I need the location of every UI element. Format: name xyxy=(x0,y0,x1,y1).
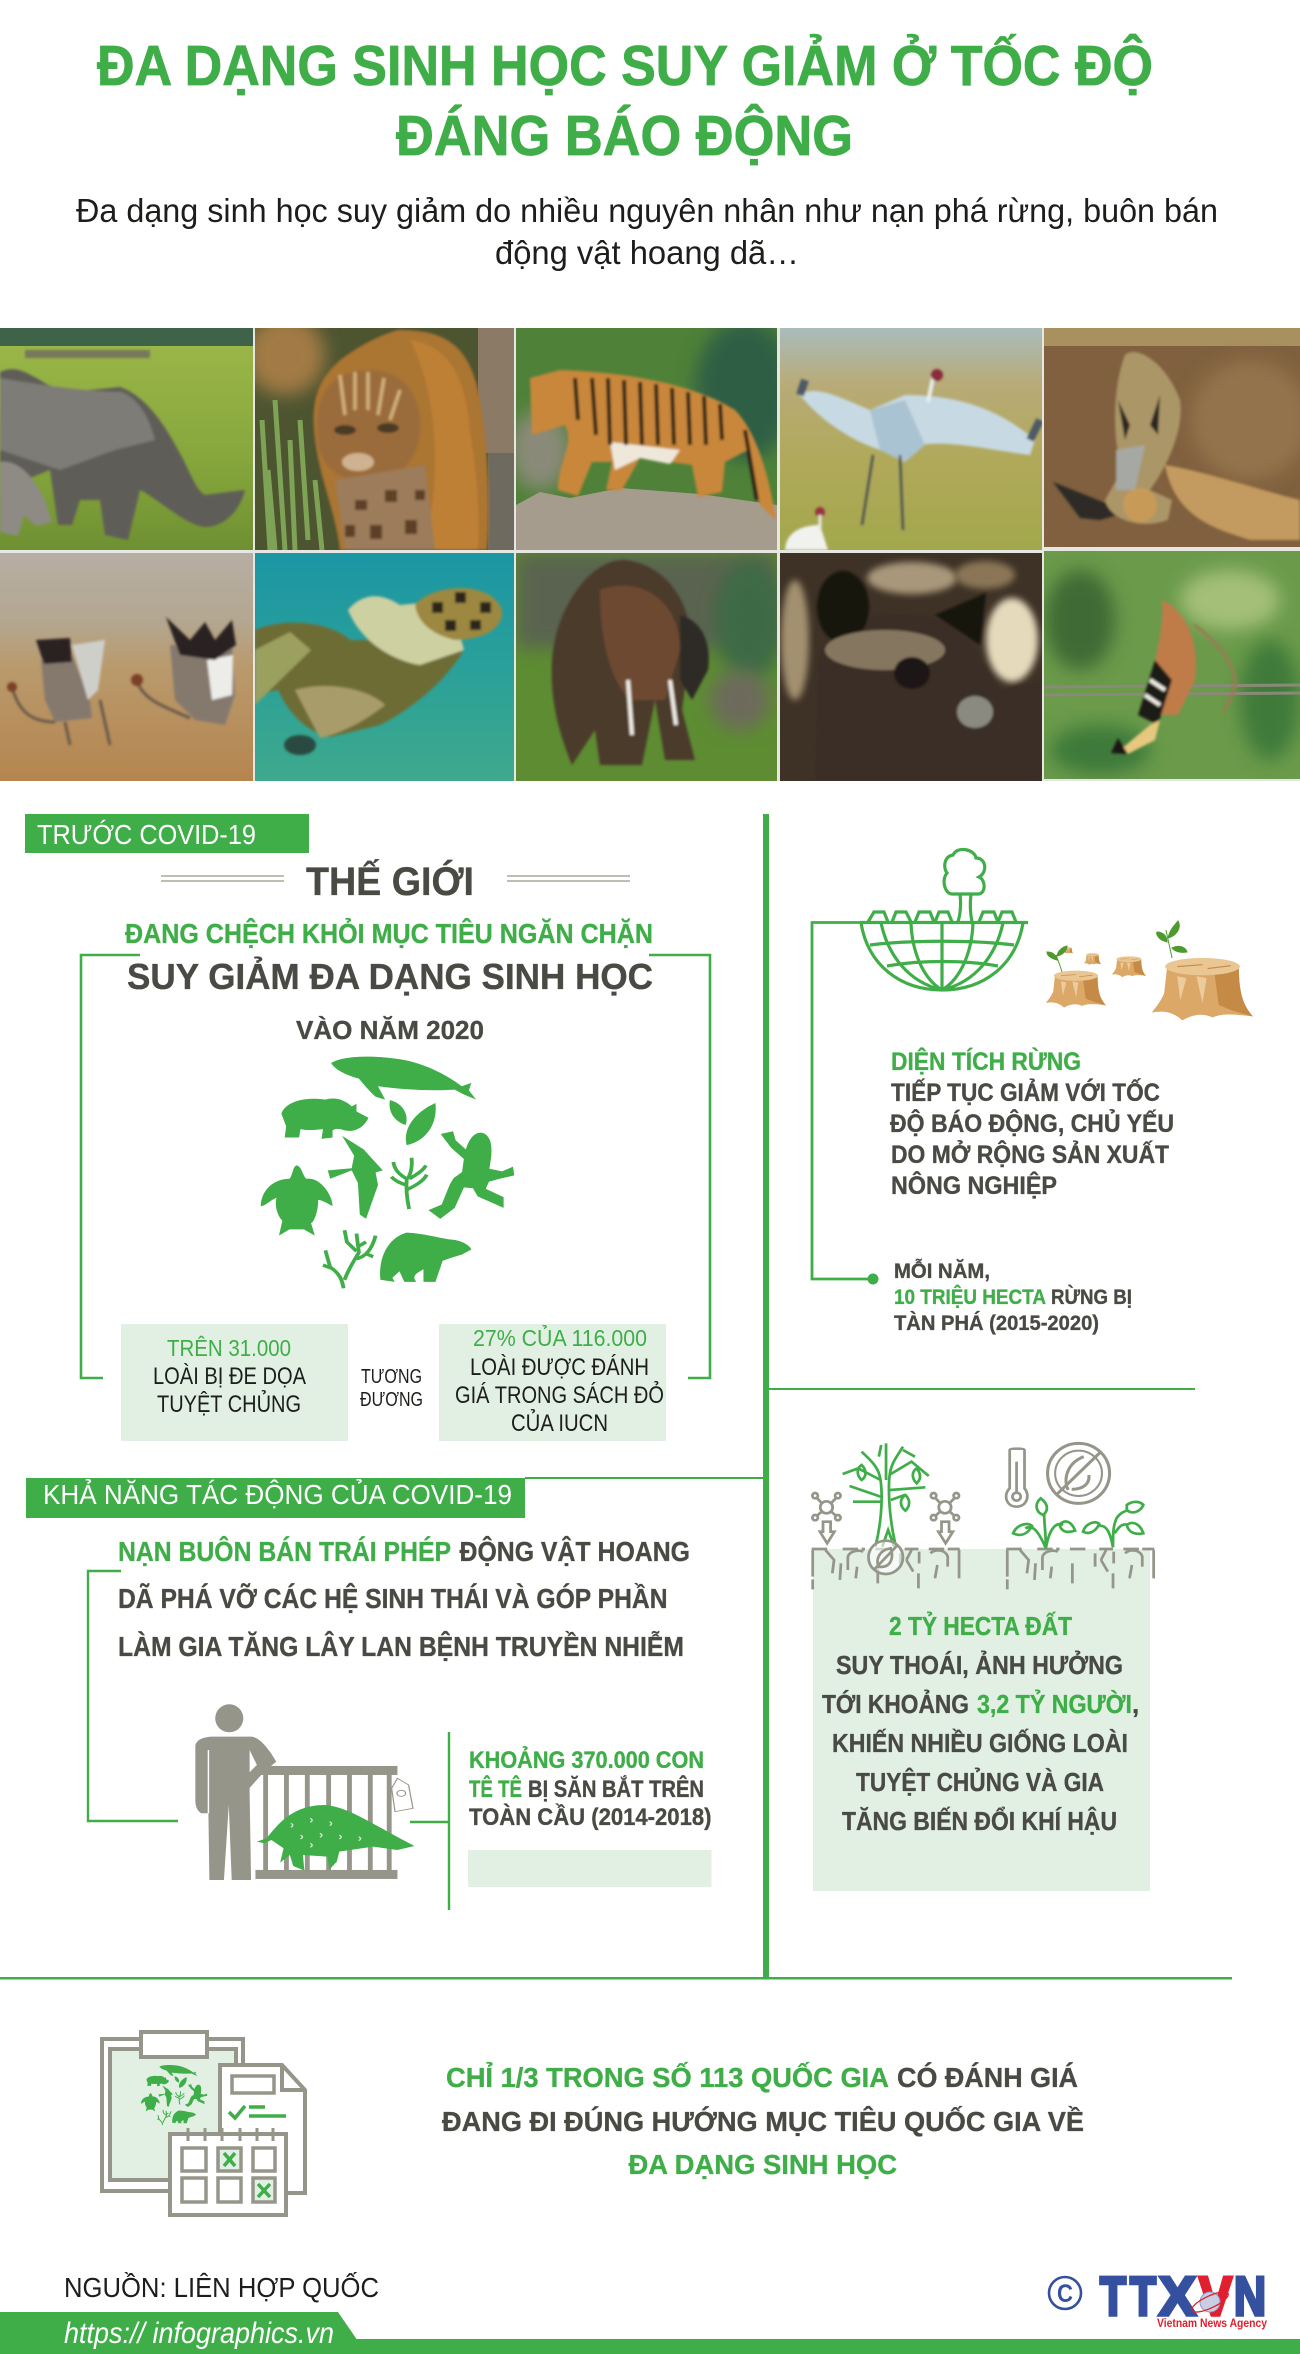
forest text: DIỆN TÍCH RỪNG xyxy=(891,1046,1081,1076)
title: ĐA DẠNG SINH HỌC SUY GIẢM Ở TỐC ĐỘ xyxy=(97,33,1153,98)
no-leaf badge small xyxy=(868,1541,903,1574)
molecules and arrows xyxy=(812,1493,959,1543)
land text: TĂNG BIẾN ĐỔI KHÍ HẬU xyxy=(842,1806,1117,1836)
footer band: https:// infographics.vn xyxy=(64,2317,334,2350)
panel: forest area xyxy=(812,849,1253,1335)
pangolin text xyxy=(469,1745,712,1831)
logo: TTXVN: N xyxy=(1234,2265,1266,2327)
national targets text: CHỈ 1/3 TRONG SỐ 113 QUỐC GIA xyxy=(446,2061,889,2093)
center vertical divider and horizontal rules xyxy=(0,814,1232,1980)
connector line with dot xyxy=(812,922,878,1284)
panel: land degradation xyxy=(812,1443,1154,1891)
photo: rhinoceros xyxy=(0,328,253,550)
land text: TỚI KHOẢNG xyxy=(822,1689,969,1719)
stat box: threatened species xyxy=(121,1324,348,1441)
logo: TTXVN: Vietnam News Agency xyxy=(1157,2318,1268,2330)
logo: TTXVN xyxy=(1049,2265,1268,2330)
empty light box xyxy=(468,1850,712,1887)
national targets text: ĐANG ĐI ĐÚNG HƯỚNG MỤC TIÊU QUỐC GIA VỀ xyxy=(442,2105,1084,2137)
photo: hoopoe xyxy=(1044,551,1300,779)
logo: TTXVN: T xyxy=(1130,2265,1156,2327)
headline: ĐANG CHỆCH KHỎI MỤC TIÊU NGĂN CHẶN xyxy=(125,917,653,949)
forest text: DO MỞ RỘNG SẢN XUẤT xyxy=(891,1139,1169,1169)
forest text xyxy=(890,1046,1174,1200)
stat box: IUCN red list: LOÀI ĐƯỢC ĐÁNH xyxy=(470,1354,649,1381)
photo: elephant xyxy=(516,553,777,781)
national targets text xyxy=(442,2061,1084,2180)
stat box: IUCN red list: CỦA IUCN xyxy=(511,1408,608,1437)
thermometer xyxy=(1006,1449,1027,1507)
frame bracket xyxy=(81,955,710,1378)
person xyxy=(195,1704,276,1880)
trafficking text: ĐỘNG VẬT HOANG xyxy=(460,1535,690,1567)
icon: tree, chemicals, seedlings and soil xyxy=(812,1443,1154,1589)
forest stat text: MỖI NĂM, xyxy=(894,1259,990,1283)
trafficking text: LÀM GIA TĂNG LÂY LAN BỆNH TRUYỀN NHIỄM xyxy=(118,1631,684,1662)
pangolin xyxy=(257,1805,414,1871)
section label: possible Covid-19 impact: KHẢ NĂNG TÁC ĐỘNG CỦA COVID-19 xyxy=(43,1478,512,1510)
trafficking text xyxy=(118,1535,690,1662)
section label: before Covid-19: TRƯỚC COVID-19 xyxy=(37,819,256,850)
land text: SUY THOÁI, ẢNH HƯỞNG xyxy=(836,1649,1123,1680)
forest text: NÔNG NGHIỆP xyxy=(891,1170,1057,1200)
stat box: threatened species: LOÀI BỊ ĐE DỌA xyxy=(153,1363,306,1390)
land text xyxy=(822,1611,1139,1836)
photo: tiger xyxy=(516,328,777,550)
pangolin text: KHOẢNG 370.000 CON xyxy=(469,1745,704,1774)
icon: species cluster xyxy=(261,1057,513,1288)
source: NGUỒN: LIÊN HỢP QUỐC xyxy=(64,2271,379,2303)
headline xyxy=(125,917,653,1045)
icon: globe with tree xyxy=(860,849,1028,990)
panel: wildlife trafficking xyxy=(88,1535,712,1910)
national targets text: ĐA DẠNG SINH HỌC xyxy=(628,2149,897,2180)
photo: sea turtle xyxy=(255,553,514,781)
forest text: TIẾP TỤC GIẢM VỚI TỐC xyxy=(891,1077,1160,1107)
pangolin text: BỊ SĂN BẮT TRÊN xyxy=(528,1775,704,1803)
forest stat text: 10 TRIỆU HECTA xyxy=(894,1285,1046,1309)
icon: clipboard, document and calendar xyxy=(102,2032,305,2215)
panel: world target xyxy=(81,917,710,1441)
frame bracket xyxy=(88,1571,178,1821)
cage xyxy=(255,1766,397,1879)
logo: TTXVN: X xyxy=(1159,2265,1196,2327)
stat box: IUCN red list xyxy=(439,1323,666,1441)
subtitle: động vật hoang dã… xyxy=(495,234,799,271)
trafficking text: NẠN BUÔN BÁN TRÁI PHÉP xyxy=(118,1535,451,1567)
heading: world xyxy=(161,858,630,904)
no-leaf badge large xyxy=(1048,1443,1110,1503)
title: ĐÁNG BÁO ĐỘNG xyxy=(396,103,853,168)
logo: TTXVN: V xyxy=(1199,2265,1232,2327)
icon: person with caged pangolin xyxy=(195,1704,414,1880)
title xyxy=(97,33,1153,168)
national targets text: CÓ ĐÁNH GIÁ xyxy=(897,2062,1078,2093)
logo: TTXVN: T xyxy=(1100,2265,1126,2327)
headline: SUY GIẢM ĐA DẠNG SINH HỌC xyxy=(127,956,653,997)
photo grid: endangered species xyxy=(0,315,1300,781)
stat box: IUCN red list: 27% CỦA 116.000 xyxy=(473,1323,647,1351)
subtitle: Đa dạng sinh học suy giảm do nhiều nguyên nhân như nạn phá rừng, buôn bán xyxy=(76,192,1218,229)
headline: VÀO NĂM 2020 xyxy=(296,1015,484,1045)
photo: flying cranes xyxy=(0,553,253,781)
land text: 2 TỶ HECTA ĐẤT xyxy=(889,1611,1072,1641)
equivalent label: TƯƠNG xyxy=(361,1366,422,1388)
icon: tree stumps xyxy=(1046,921,1253,1020)
subtitle xyxy=(76,192,1218,271)
forest text: ĐỘ BÁO ĐỘNG, CHỦ YẾU xyxy=(890,1108,1174,1138)
forest stat text xyxy=(894,1259,1132,1335)
land text: , xyxy=(1132,1689,1139,1719)
photo: sarus crane xyxy=(780,328,1042,550)
land text: KHIẾN NHIỀU GIỐNG LOÀI xyxy=(832,1728,1128,1758)
land text: TUYỆT CHỦNG VÀ GIA xyxy=(856,1766,1104,1797)
footer band xyxy=(0,2312,1300,2354)
logo: TTXVN: C xyxy=(1057,2280,1073,2308)
stat box: IUCN red list: GIÁ TRONG SÁCH ĐỎ xyxy=(455,1380,664,1409)
pangolin text: TOÀN CẦU (2014-2018) xyxy=(469,1803,712,1831)
pangolin connector xyxy=(410,1732,449,1910)
photo: civet xyxy=(780,553,1042,781)
light panel background xyxy=(813,1549,1150,1891)
equivalent label xyxy=(360,1366,423,1411)
forest stat text: TÀN PHÁ (2015-2020) xyxy=(894,1312,1099,1335)
forest stat text: RỪNG BỊ xyxy=(1051,1285,1132,1309)
land text: 3,2 TỶ NGƯỜI xyxy=(977,1689,1132,1719)
photo: cobra xyxy=(1044,328,1300,547)
trafficking text: DÃ PHÁ VỠ CÁC HỆ SINH THÁI VÀ GÓP PHẦN xyxy=(118,1583,668,1614)
price tag xyxy=(392,1778,413,1812)
section label: before Covid-19 xyxy=(25,814,309,853)
heading: world: THẾ GIỚI xyxy=(306,858,474,904)
stat box: threatened species: TRÊN 31.000 xyxy=(167,1335,291,1361)
seedlings xyxy=(1013,1498,1143,1548)
photo: golden cat xyxy=(255,328,514,550)
equivalent label: ĐƯƠNG xyxy=(360,1389,423,1411)
panel: national targets xyxy=(102,2032,1084,2215)
stat box: threatened species: TUYỆT CHỦNG xyxy=(157,1389,301,1418)
tree xyxy=(843,1443,929,1547)
pangolin text: TÊ TÊ xyxy=(469,1775,522,1803)
